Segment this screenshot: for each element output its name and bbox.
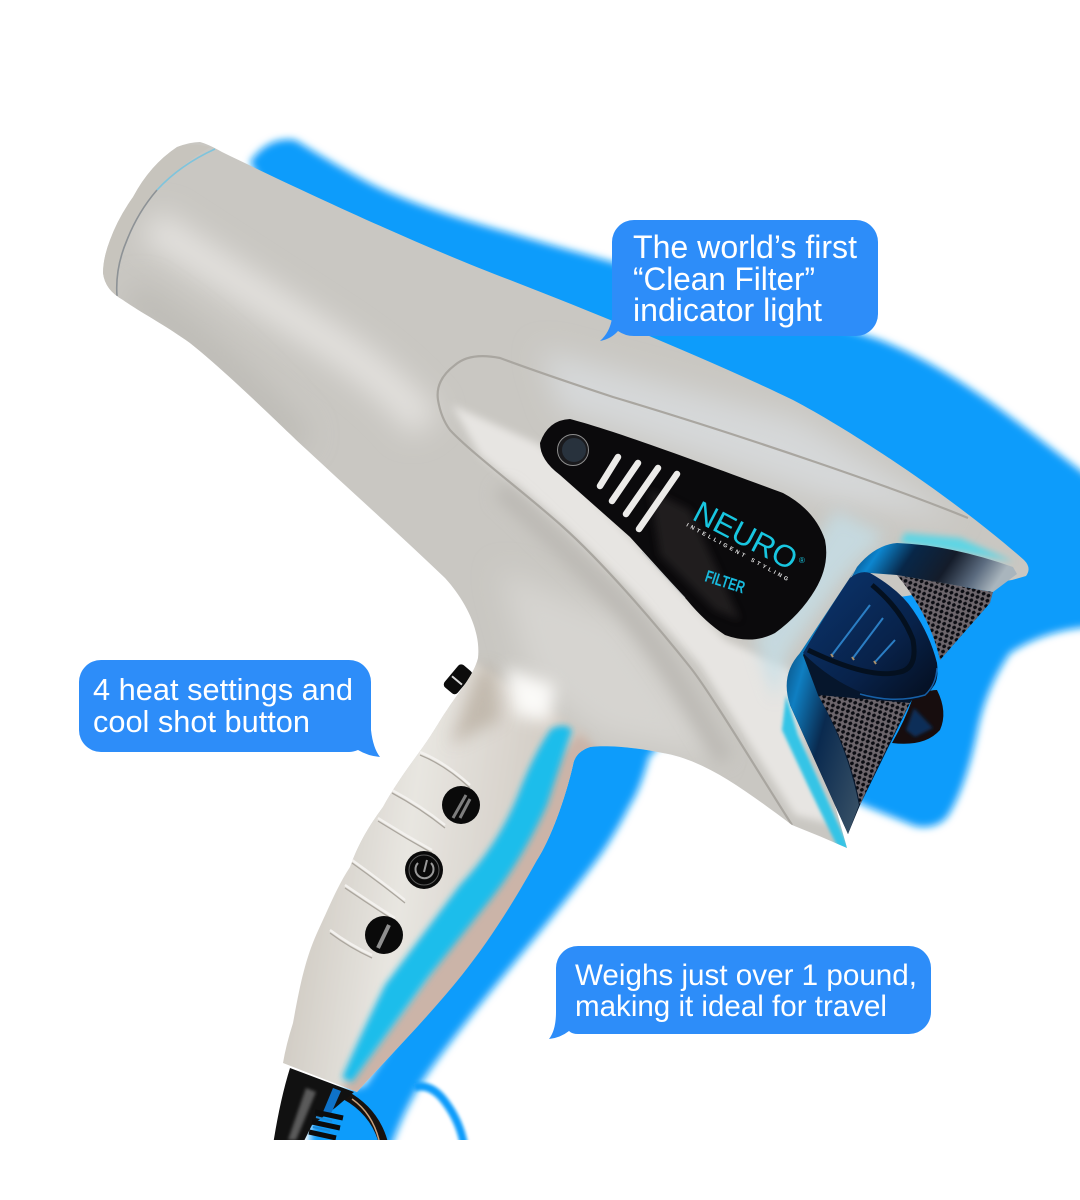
callout: weight: making it ideal for travel: [575, 990, 887, 1023]
blue cord shadow loop: [414, 1086, 464, 1145]
left rim band: [787, 570, 859, 834]
flap lower glow: [860, 668, 937, 699]
filter label: FILTER: [703, 568, 747, 598]
blue offset shadow of the dryer: [250, 139, 1080, 1150]
registered mark: ®: [799, 556, 805, 565]
callout: weight: [549, 946, 931, 1039]
black panel plate: [540, 419, 826, 640]
dryer body shell: [90, 130, 1040, 1110]
handle ridge lines: [330, 752, 470, 955]
nozzle rim band: [103, 146, 180, 295]
indicator button: [558, 434, 588, 466]
brand name NEURO: NEURO: [688, 494, 803, 577]
callout: clean filter indicator: “Clean Filter”: [633, 261, 815, 297]
tagline: INTELLIGENT STYLING: [685, 522, 789, 583]
handle rosy edge: [340, 735, 600, 1100]
intake dark backing: [790, 573, 937, 834]
handle top highlight: [505, 668, 555, 722]
shade below crease: [500, 490, 725, 760]
lower handle button: [365, 916, 403, 954]
teal glow along lower front edge: [782, 695, 850, 850]
pale blue glow near front: [755, 510, 885, 700]
hair dryer product illustration: [90, 130, 1040, 1145]
raised panel outline: [438, 356, 968, 825]
upper mesh: [897, 575, 993, 660]
vent slots: [600, 457, 677, 529]
callout: heat settings: [79, 660, 380, 757]
callout: clean filter indicator: The world’s first: [633, 229, 857, 265]
dial switch: [442, 663, 474, 696]
panel glossy edge glint: [642, 552, 685, 598]
panel reflection: [650, 490, 740, 620]
power button: [405, 851, 443, 889]
handle cyan stripe: [342, 726, 572, 1082]
infographic: hair dryer with feature callouts: [79, 133, 1080, 1140]
upper shell cool tone: [544, 353, 936, 516]
lower body tone: [512, 586, 694, 752]
handle buttons: [365, 786, 480, 954]
flap ribs: [832, 605, 895, 662]
top handle button: [442, 786, 480, 824]
top rim band: [850, 543, 1017, 592]
control panel: [540, 419, 826, 640]
callout: heat settings: 4 heat settings and: [93, 672, 353, 707]
callout: weight: Weighs just over 1 pound,: [575, 959, 917, 992]
rear air intake: [787, 543, 1017, 834]
rear dark knob: [892, 690, 943, 744]
nozzle rim line: [117, 190, 157, 296]
barrel light sweep: [150, 225, 425, 425]
lower mesh: [818, 695, 910, 805]
flap: [803, 572, 938, 700]
cord and strain relief: [273, 1068, 384, 1145]
flap groove: [808, 585, 914, 674]
handle shading: [283, 664, 590, 1092]
callout: clean filter indicator: indicator light: [633, 292, 822, 328]
barrel lower shade: [130, 295, 300, 445]
callout: heat settings: cool shot button: [93, 704, 310, 739]
callout: clean filter indicator: [600, 220, 878, 341]
teal glow along top rim: [900, 533, 1014, 562]
light strip between crease and panel: [452, 405, 835, 825]
